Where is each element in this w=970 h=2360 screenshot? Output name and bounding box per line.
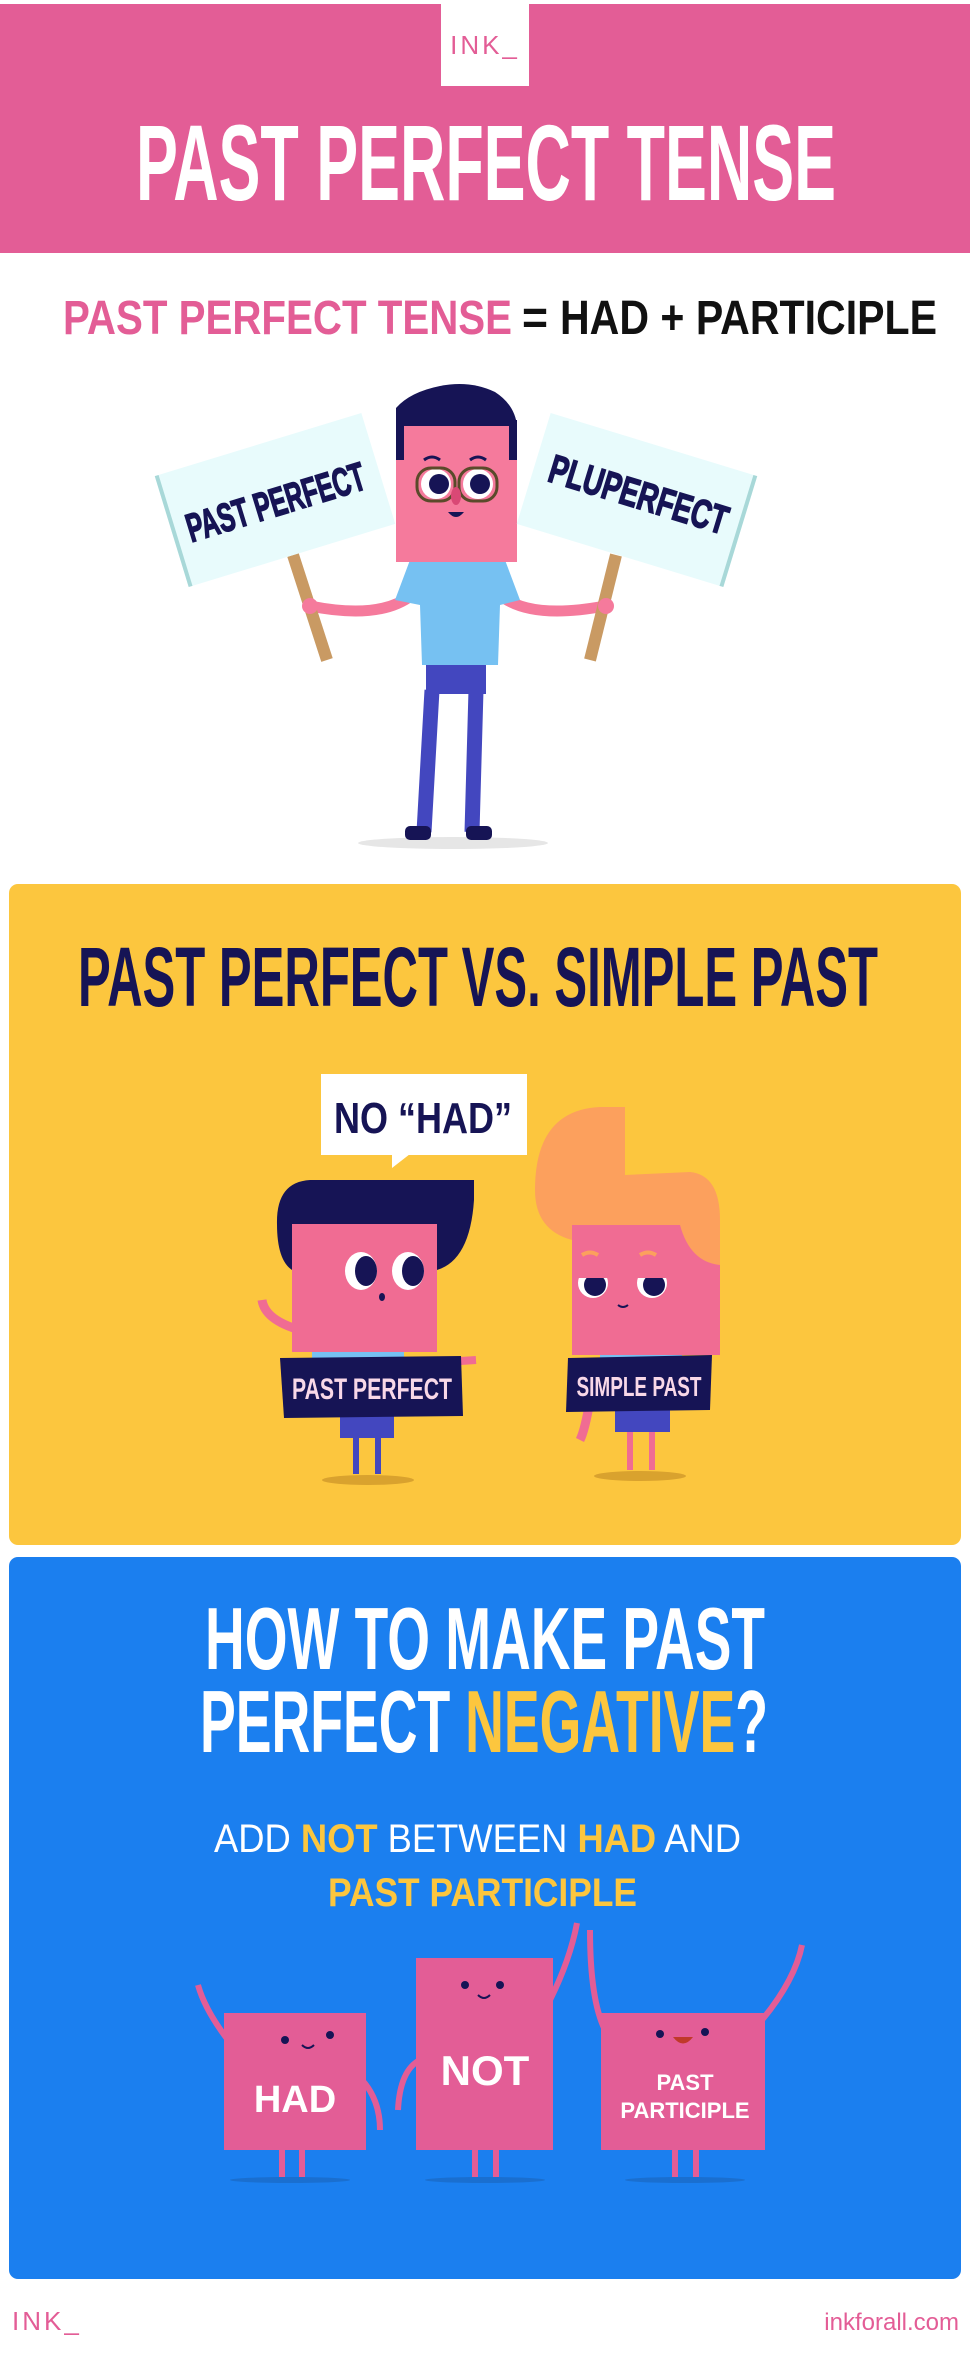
sign: SIMPLE PAST: [576, 1371, 702, 1402]
sign: pluperfect: [517, 413, 757, 587]
shirt: [395, 560, 520, 665]
character: simple past: [535, 1107, 720, 1481]
panel: past perfect vs simple past: [9, 884, 961, 1545]
block: past participle: PARTICIPLE: [620, 2098, 750, 2123]
formula: [63, 292, 937, 345]
illustration: man with signs: [155, 384, 757, 849]
speech bubble: NO “HAD”: [334, 1094, 512, 1143]
sign: [566, 1355, 712, 1412]
footer logo: INK_: [12, 2306, 82, 2336]
sign: past perfect: [155, 413, 395, 587]
footer url: inkforall.com: [824, 2309, 959, 2336]
instruction text: [214, 1817, 741, 1915]
block: had: HAD: [254, 2079, 336, 2121]
sign sticks: [293, 555, 327, 660]
panel: how to make past perfect negative: [9, 1557, 961, 2279]
logo box: INK_: [450, 30, 520, 60]
header band: [0, 0, 970, 253]
logo box: [441, 0, 529, 86]
sign: [280, 1356, 463, 1418]
block: not: NOT: [441, 2047, 530, 2094]
block: not: [398, 1923, 577, 2183]
sign: PAST PERFECT: [292, 1373, 452, 1406]
arms: [310, 595, 412, 611]
formula: PAST PERFECT TENSE: [63, 292, 512, 345]
heading: [200, 1589, 768, 1771]
character: past perfect: [262, 1180, 476, 1485]
block: past participle: PAST: [656, 2070, 714, 2095]
sign: pluperfect: PLUPERFECT: [544, 447, 733, 543]
legs: [424, 690, 476, 832]
block: past participle: [590, 1930, 802, 2183]
speech bubble: [321, 1074, 527, 1168]
formula: =: [522, 292, 548, 345]
face: [396, 426, 517, 562]
instruction text: ADD NOT BETWEEN HAD AND: [214, 1817, 741, 1861]
heading: PERFECT NEGATIVE?: [200, 1672, 768, 1771]
block: had: [198, 1985, 380, 2183]
sign: past perfect: PAST PERFECT: [181, 455, 371, 551]
instruction text: PAST PARTICIPLE: [328, 1871, 637, 1915]
